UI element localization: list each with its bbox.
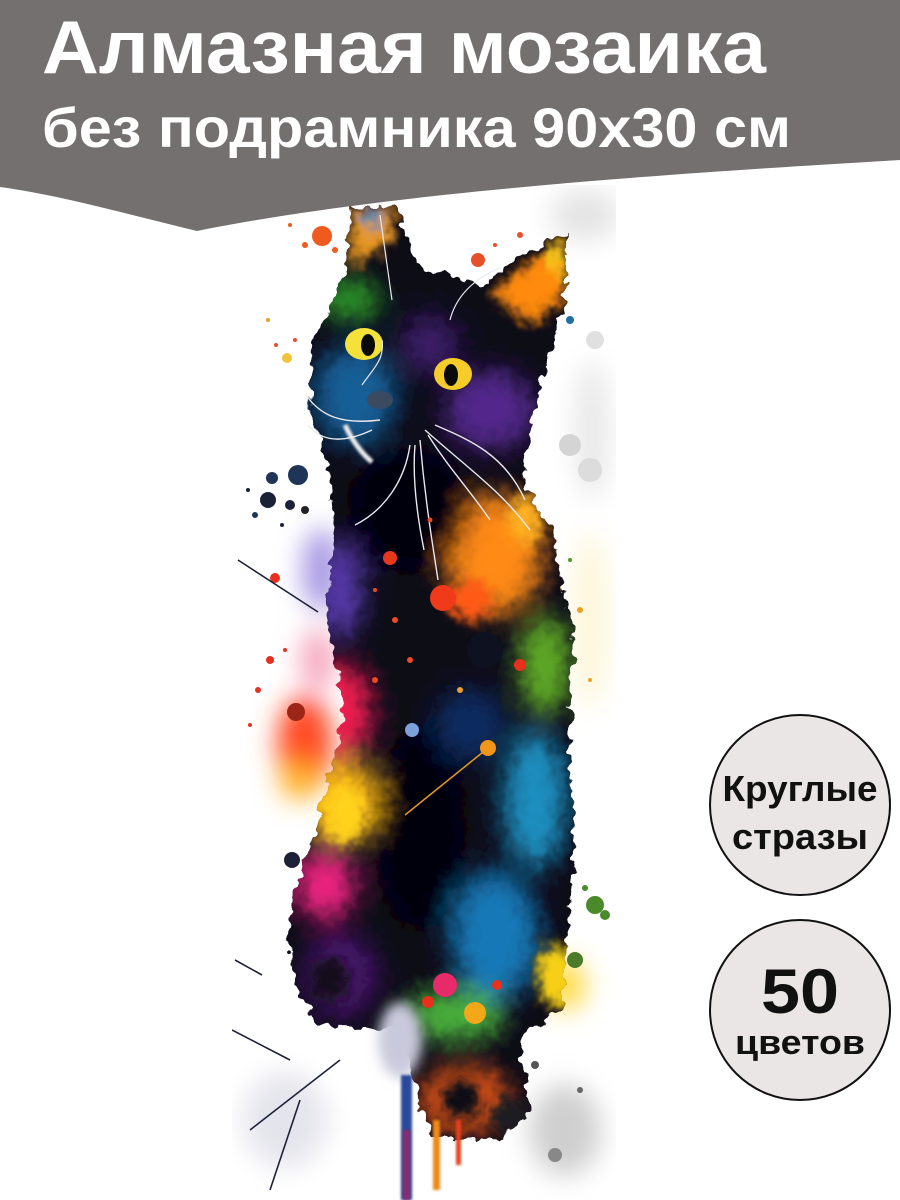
cat silhouette with colour patches — [286, 204, 578, 1142]
paint on the body — [372, 518, 526, 1024]
badge: 50 colours: 50 — [761, 957, 839, 1027]
header banner — [0, 0, 900, 231]
artwork: black cat with paint splashes — [232, 185, 620, 1200]
title — [42, 5, 791, 159]
badge: round rhinestones — [710, 715, 890, 895]
paint wash behind the cat — [243, 189, 620, 1176]
title: без подрамника 90х30 см — [42, 96, 791, 159]
paint drips at bottom — [378, 1002, 461, 1200]
title: Алмазная мозаика — [42, 5, 767, 89]
whiskers and nose — [306, 215, 530, 580]
badge: round rhinestones: Круглые — [722, 768, 878, 809]
eyes — [345, 328, 472, 390]
badge: 50 colours — [710, 920, 890, 1100]
splatters — [232, 223, 610, 1190]
badge: 50 colours: цветов — [735, 1024, 865, 1062]
badge: round rhinestones: стразы — [732, 816, 868, 857]
